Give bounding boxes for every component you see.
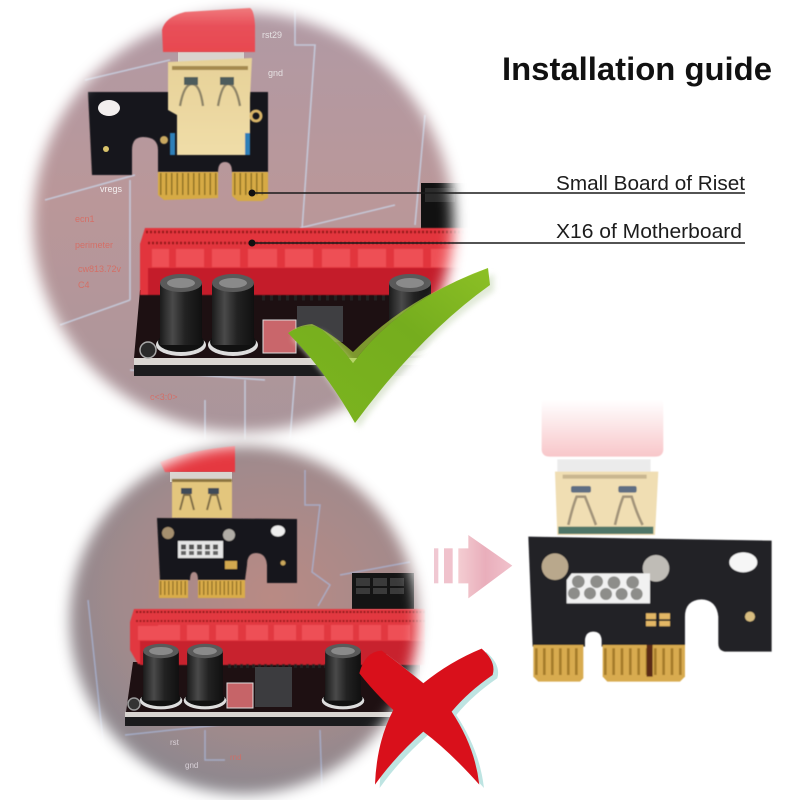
grey chip (255, 667, 292, 707)
pink resistor (263, 320, 296, 353)
panel: correct installation photo circle (0, 0, 500, 450)
icon: green check mark (288, 268, 494, 428)
label: small board of riser: Small Board of Riset (556, 173, 745, 195)
gold USB connector (160, 58, 261, 155)
gold USB connector (172, 479, 232, 518)
faint schematic labels: c<3:0> (150, 392, 178, 402)
faint schematic labels: ecn1 (75, 214, 95, 224)
red ribbon cable (162, 8, 255, 52)
faint schematic labels (170, 738, 242, 770)
gold fingers (159, 580, 245, 598)
arrow pointing to enlarged board (434, 535, 512, 598)
gold USB connector (555, 472, 658, 535)
faint schematic labels: gnd (185, 761, 198, 770)
faint schematic labels: C4 (78, 280, 90, 290)
white ribbon (170, 472, 232, 482)
faint schematic labels: rnd (230, 753, 242, 762)
faint schematic labels: cw813.72v (78, 264, 122, 274)
red X16 slot (130, 609, 425, 666)
panel: wrong installation photo circle (40, 430, 498, 800)
small riser board black PCB (88, 92, 268, 175)
icon: red cross (359, 649, 498, 788)
label: X16 of motherboard: X16 of Motherboard (556, 221, 742, 243)
faint schematic labels (75, 30, 283, 402)
gold fingers (533, 645, 685, 682)
motherboard PCB (134, 290, 411, 376)
capacitors (156, 274, 435, 356)
pink resistor (227, 683, 253, 708)
white ribbon (178, 52, 244, 62)
panel: enlarged riser board (528, 400, 772, 682)
small riser board rear PCB (157, 518, 297, 583)
faded red cable (542, 400, 663, 457)
white solder pad (567, 573, 650, 603)
label line: X16 slot (248, 240, 745, 246)
faint schematic labels: rst (170, 738, 180, 747)
black power connector (421, 183, 464, 229)
faint schematic labels: perimeter (75, 240, 113, 250)
red ribbon cable (160, 446, 235, 472)
mounting hole (98, 100, 120, 116)
label line: small board (248, 190, 745, 196)
schematic traces (45, 10, 425, 440)
gold fingers (158, 172, 268, 201)
schematic traces (88, 470, 410, 790)
title: Installation guide (502, 51, 772, 87)
circuit background (60, 437, 428, 800)
grey chip (297, 306, 343, 342)
white ribbon (557, 459, 651, 473)
gold test pads (646, 613, 670, 626)
capacitors (140, 644, 364, 709)
motherboard PCB (125, 662, 425, 726)
mounting hole (729, 552, 757, 572)
faint schematic labels: rst29 (262, 30, 282, 40)
faint schematic labels: vregs (100, 184, 123, 194)
circuit background (24, 3, 458, 440)
red X16 slot (140, 228, 470, 298)
faint schematic labels: gnd (268, 68, 283, 78)
solder points (542, 553, 568, 580)
black PCB (528, 537, 772, 652)
black power connector (352, 573, 414, 609)
